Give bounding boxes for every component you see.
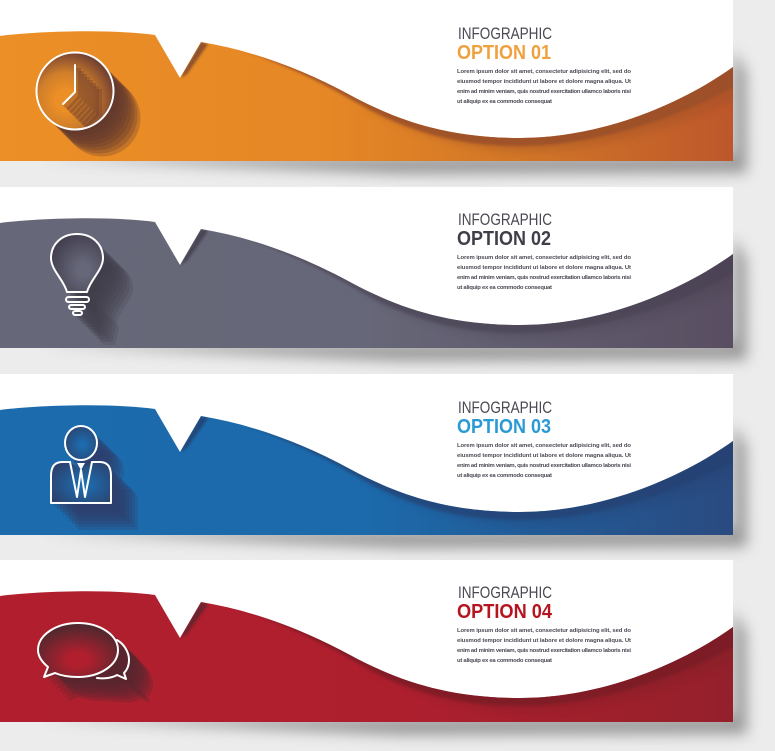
body text: ut aliquip ex ea commodo consequat: [457, 658, 552, 664]
option title: OPTION 02: [457, 228, 551, 250]
option title: OPTION 03: [457, 416, 551, 438]
body text: ut aliquip ex ea commodo consequat: [457, 473, 552, 479]
icon: light bulb: [51, 234, 133, 345]
blue wave band: [0, 405, 733, 535]
body text: enim ad minim veniam, quis nostrud exercitation ullamco laboris nisi: [457, 648, 631, 654]
panel: option 04: [0, 560, 747, 735]
body text: eiusmod tempor incididunt ut labore et dolore magna aliqua. Ut: [457, 79, 631, 85]
icon: clock: [36, 52, 140, 156]
wave shadow: [180, 42, 740, 152]
wave shadow: [180, 229, 740, 339]
heading: INFOGRAPHIC: [458, 584, 552, 602]
body text: enim ad minim veniam, quis nostrud exercitation ullamco laboris nisi: [457, 89, 631, 95]
red wave band: [0, 591, 733, 722]
panel shadow: [40, 50, 747, 174]
body text: [457, 628, 631, 664]
panel shadow: [40, 237, 747, 361]
icon: speech bubbles: [38, 623, 153, 703]
body text: ut aliquip ex ea commodo consequat: [457, 99, 552, 105]
option title: OPTION 04: [457, 601, 553, 623]
panel shadow: [40, 610, 747, 735]
grey wave band: [0, 218, 733, 348]
body text: eiusmod tempor incididunt ut labore et dolore magna aliqua. Ut: [457, 265, 631, 271]
body text: Lorem ipsum dolor sit amet, consectetur adipisicing elit, sed do: [457, 69, 631, 75]
heading: INFOGRAPHIC: [458, 399, 552, 417]
body text: enim ad minim veniam, quis nostrud exercitation ullamco laboris nisi: [457, 275, 631, 281]
body text: eiusmod tempor incididunt ut labore et dolore magna aliqua. Ut: [457, 453, 631, 459]
wave shadow: [180, 416, 740, 526]
body text: [457, 255, 631, 291]
body text: [457, 443, 631, 479]
panel: option 02: [0, 187, 747, 361]
heading: INFOGRAPHIC: [458, 211, 552, 229]
body text: [457, 69, 631, 105]
orange wave band: [0, 31, 733, 161]
body text: enim ad minim veniam, quis nostrud exercitation ullamco laboris nisi: [457, 463, 631, 469]
white card: [0, 560, 733, 722]
option title: OPTION 01: [457, 42, 551, 64]
white card: [0, 0, 733, 161]
body text: eiusmod tempor incididunt ut labore et dolore magna aliqua. Ut: [457, 638, 631, 644]
white card: [0, 187, 733, 348]
wave shadow: [180, 602, 740, 712]
heading: INFOGRAPHIC: [458, 25, 552, 43]
white card: [0, 374, 733, 535]
panel shadow: [40, 424, 747, 548]
body text: Lorem ipsum dolor sit amet, consectetur adipisicing elit, sed do: [457, 255, 631, 261]
body text: Lorem ipsum dolor sit amet, consectetur adipisicing elit, sed do: [457, 628, 631, 634]
body text: Lorem ipsum dolor sit amet, consectetur adipisicing elit, sed do: [457, 443, 631, 449]
panel: option 01: [0, 0, 747, 174]
body text: ut aliquip ex ea commodo consequat: [457, 285, 552, 291]
icon: businessman: [51, 426, 138, 530]
panel: option 03: [0, 374, 747, 548]
